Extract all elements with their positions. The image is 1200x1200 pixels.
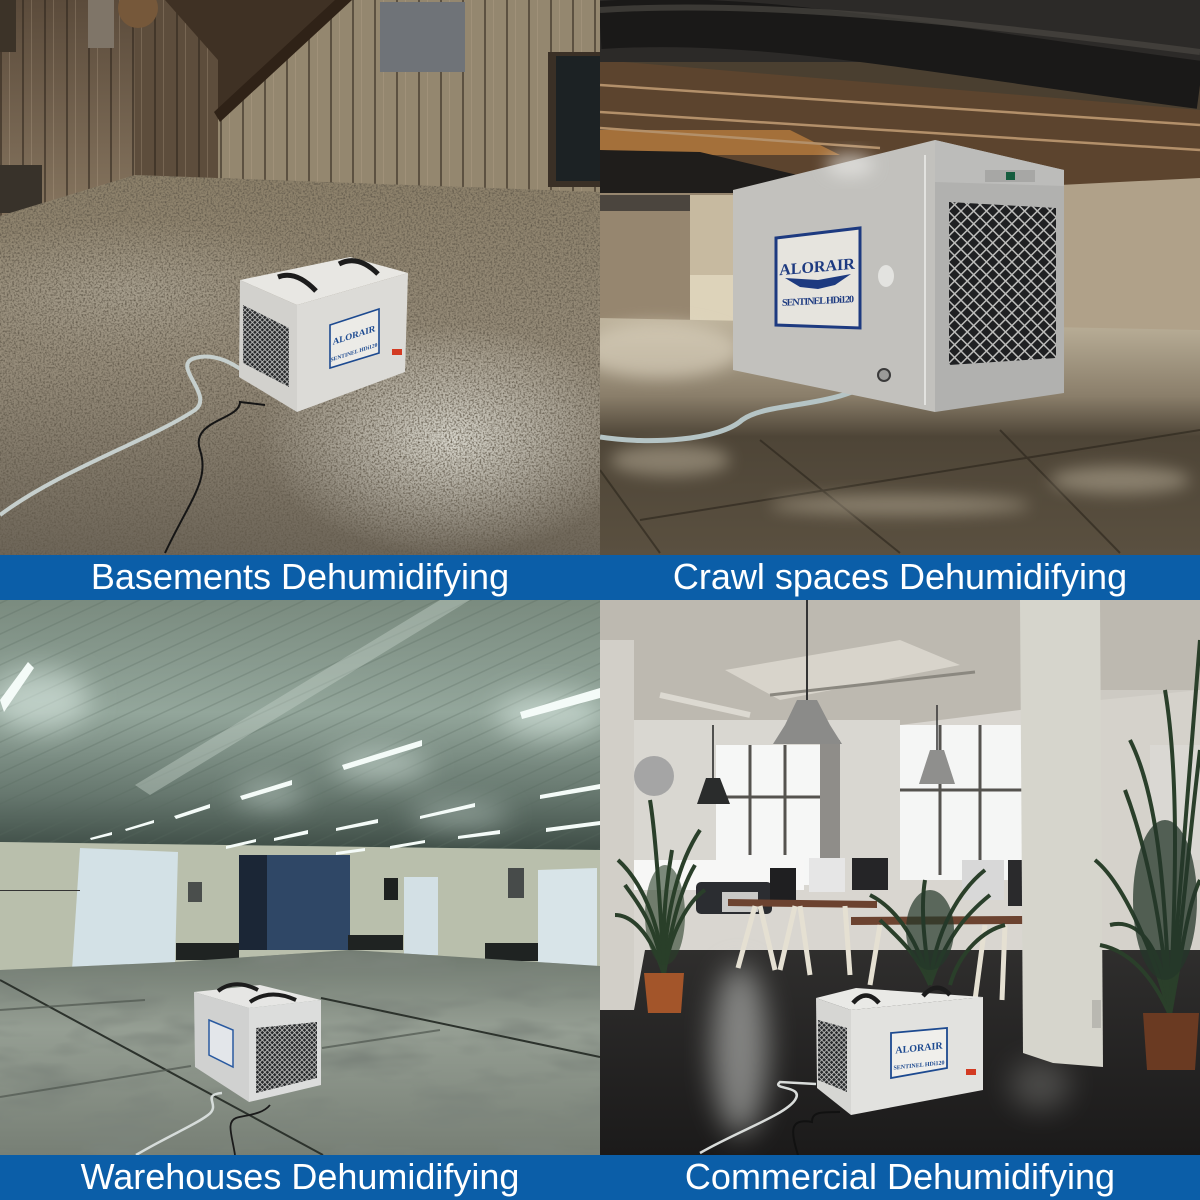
hose [600, 392, 852, 444]
concrete floor [0, 945, 600, 1155]
photo: wood-panelled basement [0, 0, 640, 555]
wall skirting [176, 943, 239, 960]
panel: commercial [600, 600, 1200, 1155]
wall decoration [118, 0, 158, 28]
panel: crawl spaces [580, 0, 1200, 555]
panel: basements [0, 0, 640, 555]
hose and cord [700, 1082, 840, 1155]
dehumidifier unit large: ALORAIR [779, 256, 855, 279]
ceiling joists [600, 62, 1200, 185]
caption bar: basements [0, 555, 600, 600]
doorway [548, 52, 600, 187]
concrete column [1020, 600, 1103, 1067]
sticky note [1042, 765, 1055, 777]
potted plants [615, 640, 1200, 1070]
dehumidifier unit [239, 257, 408, 412]
hose and cord [136, 1093, 270, 1155]
caption text: Crawl spaces Dehumidifying [673, 556, 1127, 597]
panel: warehouses [0, 600, 605, 1155]
caption bar: warehouses [0, 1155, 600, 1200]
photo collage on wall [380, 2, 465, 72]
pendant lamps [634, 600, 955, 804]
foundation walls [600, 193, 735, 323]
plastic vapor barrier floor [600, 318, 1200, 555]
dehumidifier unit large: SENTINEL HDi120 [782, 294, 854, 309]
dehumidifier unit: SENTINEL HDi120 [893, 1060, 945, 1072]
computers [770, 868, 796, 900]
caption text: Warehouses Dehumidifying [81, 1156, 519, 1197]
dehumidifier unit large [733, 140, 1064, 412]
dehumidifier unit [194, 984, 321, 1102]
dehumidifier unit: SENTINEL HDi120 [331, 342, 378, 364]
caption text: Commercial Dehumidifying [685, 1156, 1115, 1197]
windows [716, 745, 820, 885]
photo: office [600, 600, 1200, 1155]
sofa [696, 882, 772, 914]
dark polished floor [600, 950, 1200, 1155]
photo: crawl space [580, 0, 1200, 555]
ceiling lights [0, 662, 600, 855]
hvac ducts [600, 0, 1200, 62]
desks [728, 899, 877, 908]
caption bar: commercial [600, 1155, 1200, 1200]
electrical boxes [188, 882, 202, 902]
photo: warehouse [0, 600, 605, 1155]
speckled floor [0, 170, 640, 555]
dehumidifier unit: ALORAIR [333, 323, 376, 347]
sliding doors [72, 848, 178, 970]
dehumidifier unit: ALORAIR [895, 1040, 943, 1056]
dehumidifier unit [816, 988, 983, 1115]
caption text: Basements Dehumidifying [91, 556, 509, 597]
caption bar: crawl spaces [600, 555, 1200, 600]
hose and cord [0, 356, 265, 553]
